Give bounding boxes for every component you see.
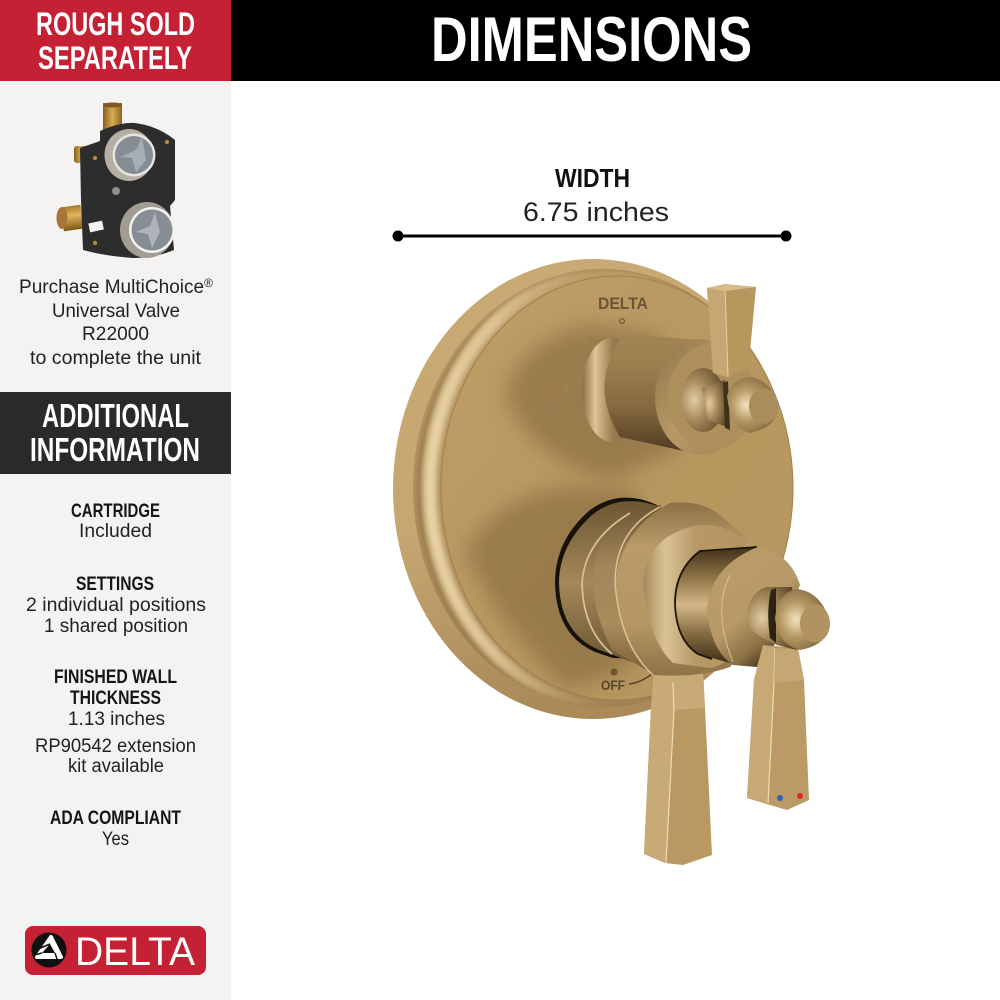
escutcheon plate xyxy=(393,259,793,719)
text block: purchase valve note: Purchase MultiChoice xyxy=(19,277,204,298)
text block: purchase valve note xyxy=(19,276,213,369)
banner: rough sold separately xyxy=(0,0,231,81)
label: width measurement: 6.75 inches xyxy=(523,197,669,227)
arrow: width dimension line xyxy=(392,230,792,242)
product: shower valve trim xyxy=(393,259,830,865)
banner: rough sold separately: SEPARATELY xyxy=(38,40,192,76)
banner: rough sold separately: ROUGH SOLD xyxy=(36,6,195,42)
lower knob end cap xyxy=(747,587,830,650)
panel: left sidebar xyxy=(0,0,231,1000)
plate engraving: OFF xyxy=(601,677,625,693)
plate engraving: DELTA xyxy=(598,294,648,313)
logo: delta xyxy=(25,926,206,975)
spec: cartridge xyxy=(71,501,160,542)
plate engraving xyxy=(564,294,652,693)
label: width measurement xyxy=(523,163,669,227)
spec: settings: 1 shared position xyxy=(44,616,188,637)
spec: finished wall thickness: 1.13 inches xyxy=(68,709,165,730)
lower knob xyxy=(555,498,800,676)
logo: delta: DELTA xyxy=(75,930,195,974)
spec: finished wall thickness: THICKNESS xyxy=(70,688,161,709)
heading: dimensions: DIMENSIONS xyxy=(431,5,752,75)
spec: settings: 2 individual positions xyxy=(26,595,206,616)
label: width measurement: WIDTH xyxy=(555,163,630,193)
text block: purchase valve note: Universal Valve xyxy=(52,301,180,322)
spec: ada compliant: Yes xyxy=(102,829,129,850)
heading: additional information: INFORMATION xyxy=(30,431,200,468)
text block: purchase valve note: to complete the unit xyxy=(30,348,202,369)
spec: ada compliant xyxy=(50,808,181,850)
spec: finished wall thickness: kit available xyxy=(68,756,164,777)
spec: ada compliant: ADA COMPLIANT xyxy=(50,808,181,829)
spec: settings xyxy=(26,574,206,637)
heading: additional information: ADDITIONAL xyxy=(42,397,189,434)
lower lever handle xyxy=(644,670,712,865)
spec: finished wall thickness: RP90542 extension xyxy=(35,736,196,757)
spec: cartridge: Included xyxy=(79,521,152,542)
icon: rough-in valve xyxy=(56,102,175,258)
upper lever handle xyxy=(707,284,756,377)
spec: settings: SETTINGS xyxy=(76,574,154,595)
spec: cartridge: CARTRIDGE xyxy=(71,501,160,522)
spec: finished wall thickness: FINISHED WALL xyxy=(54,667,177,688)
text block: purchase valve note: R22000 xyxy=(82,324,149,345)
right lever handle xyxy=(747,645,809,810)
spec: finished wall thickness xyxy=(35,667,196,777)
heading: additional information xyxy=(0,392,231,474)
text block: purchase valve note: ® xyxy=(204,276,213,290)
heading: dimensions xyxy=(231,0,1000,81)
upper knob xyxy=(582,336,778,455)
